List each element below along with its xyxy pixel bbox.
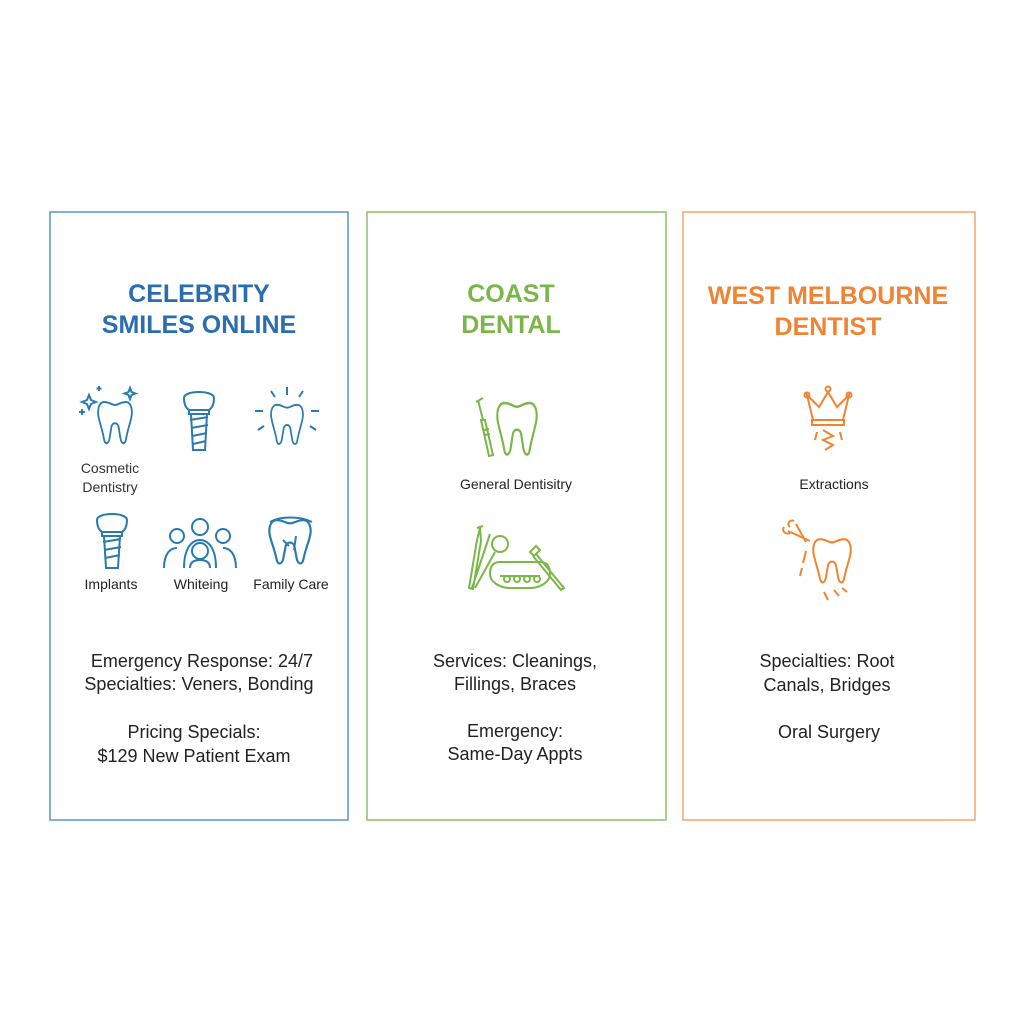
text block: pricing: $129 New Patient Exam (97, 746, 291, 766)
icon: whitening tooth (255, 387, 319, 444)
text block: emergency: Emergency: (467, 721, 563, 741)
heading: celebrity smiles online: SMILES ONLINE (102, 311, 296, 339)
heading: west melbourne dentist (708, 282, 948, 341)
text block: specialties (759, 651, 895, 695)
text block: emergency / specialties: Specialties: Veners, Bonding (84, 674, 314, 694)
text block: emergency: Same-Day Appts (447, 744, 583, 764)
icon: implant (184, 392, 214, 450)
heading: coast dental (461, 280, 561, 339)
label: extractions: Extractions (799, 476, 869, 492)
text block: specialties: Specialties: Root (759, 651, 895, 671)
labels: row 2: Implants (85, 576, 137, 592)
heading: coast dental: COAST (467, 280, 555, 308)
icon: family care tooth (269, 518, 312, 563)
heading: west melbourne dentist: DENTIST (775, 313, 881, 341)
label: cosmetic dentistry (81, 460, 139, 495)
text block: emergency / specialties (84, 651, 314, 694)
icon: tooth with pliers (783, 521, 851, 600)
text block: services (433, 651, 597, 694)
heading: coast dental: DENTAL (461, 311, 561, 339)
label: cosmetic dentistry: Cosmetic (81, 460, 139, 476)
text block: oral surgery: Oral Surgery (778, 722, 880, 742)
icon: sparkling tooth (79, 386, 136, 443)
icon: implant 2 (97, 514, 127, 568)
panel: celebrity smiles online (50, 212, 348, 820)
text block: services: Services: Cleanings, (433, 651, 597, 671)
heading: celebrity smiles online (102, 280, 296, 339)
icon: dental tools and braces (469, 526, 564, 590)
text block: emergency / specialties: Emergency Response: 24/7 (91, 651, 313, 671)
label: general dentistry: General Dentisitry (460, 476, 572, 492)
panel: coast dental (367, 212, 666, 820)
text block: specialties: Canals, Bridges (763, 675, 891, 695)
labels: row 2 (85, 576, 329, 592)
text block: emergency (447, 721, 583, 764)
icon: family (164, 519, 236, 568)
text block: pricing: Pricing Specials: (127, 722, 261, 742)
panel: west melbourne dentist (683, 212, 975, 820)
heading: celebrity smiles online: CELEBRITY (128, 280, 270, 308)
text block: services: Fillings, Braces (454, 674, 576, 694)
labels: row 2: Family Care (253, 576, 329, 592)
label: cosmetic dentistry: Dentistry (82, 479, 138, 495)
labels: row 2: Whiteing (174, 576, 228, 592)
text block: pricing (97, 722, 291, 766)
icon: tooth with probe (476, 398, 537, 456)
icon: crown (804, 386, 852, 450)
heading: west melbourne dentist: WEST MELBOURNE (708, 282, 948, 310)
